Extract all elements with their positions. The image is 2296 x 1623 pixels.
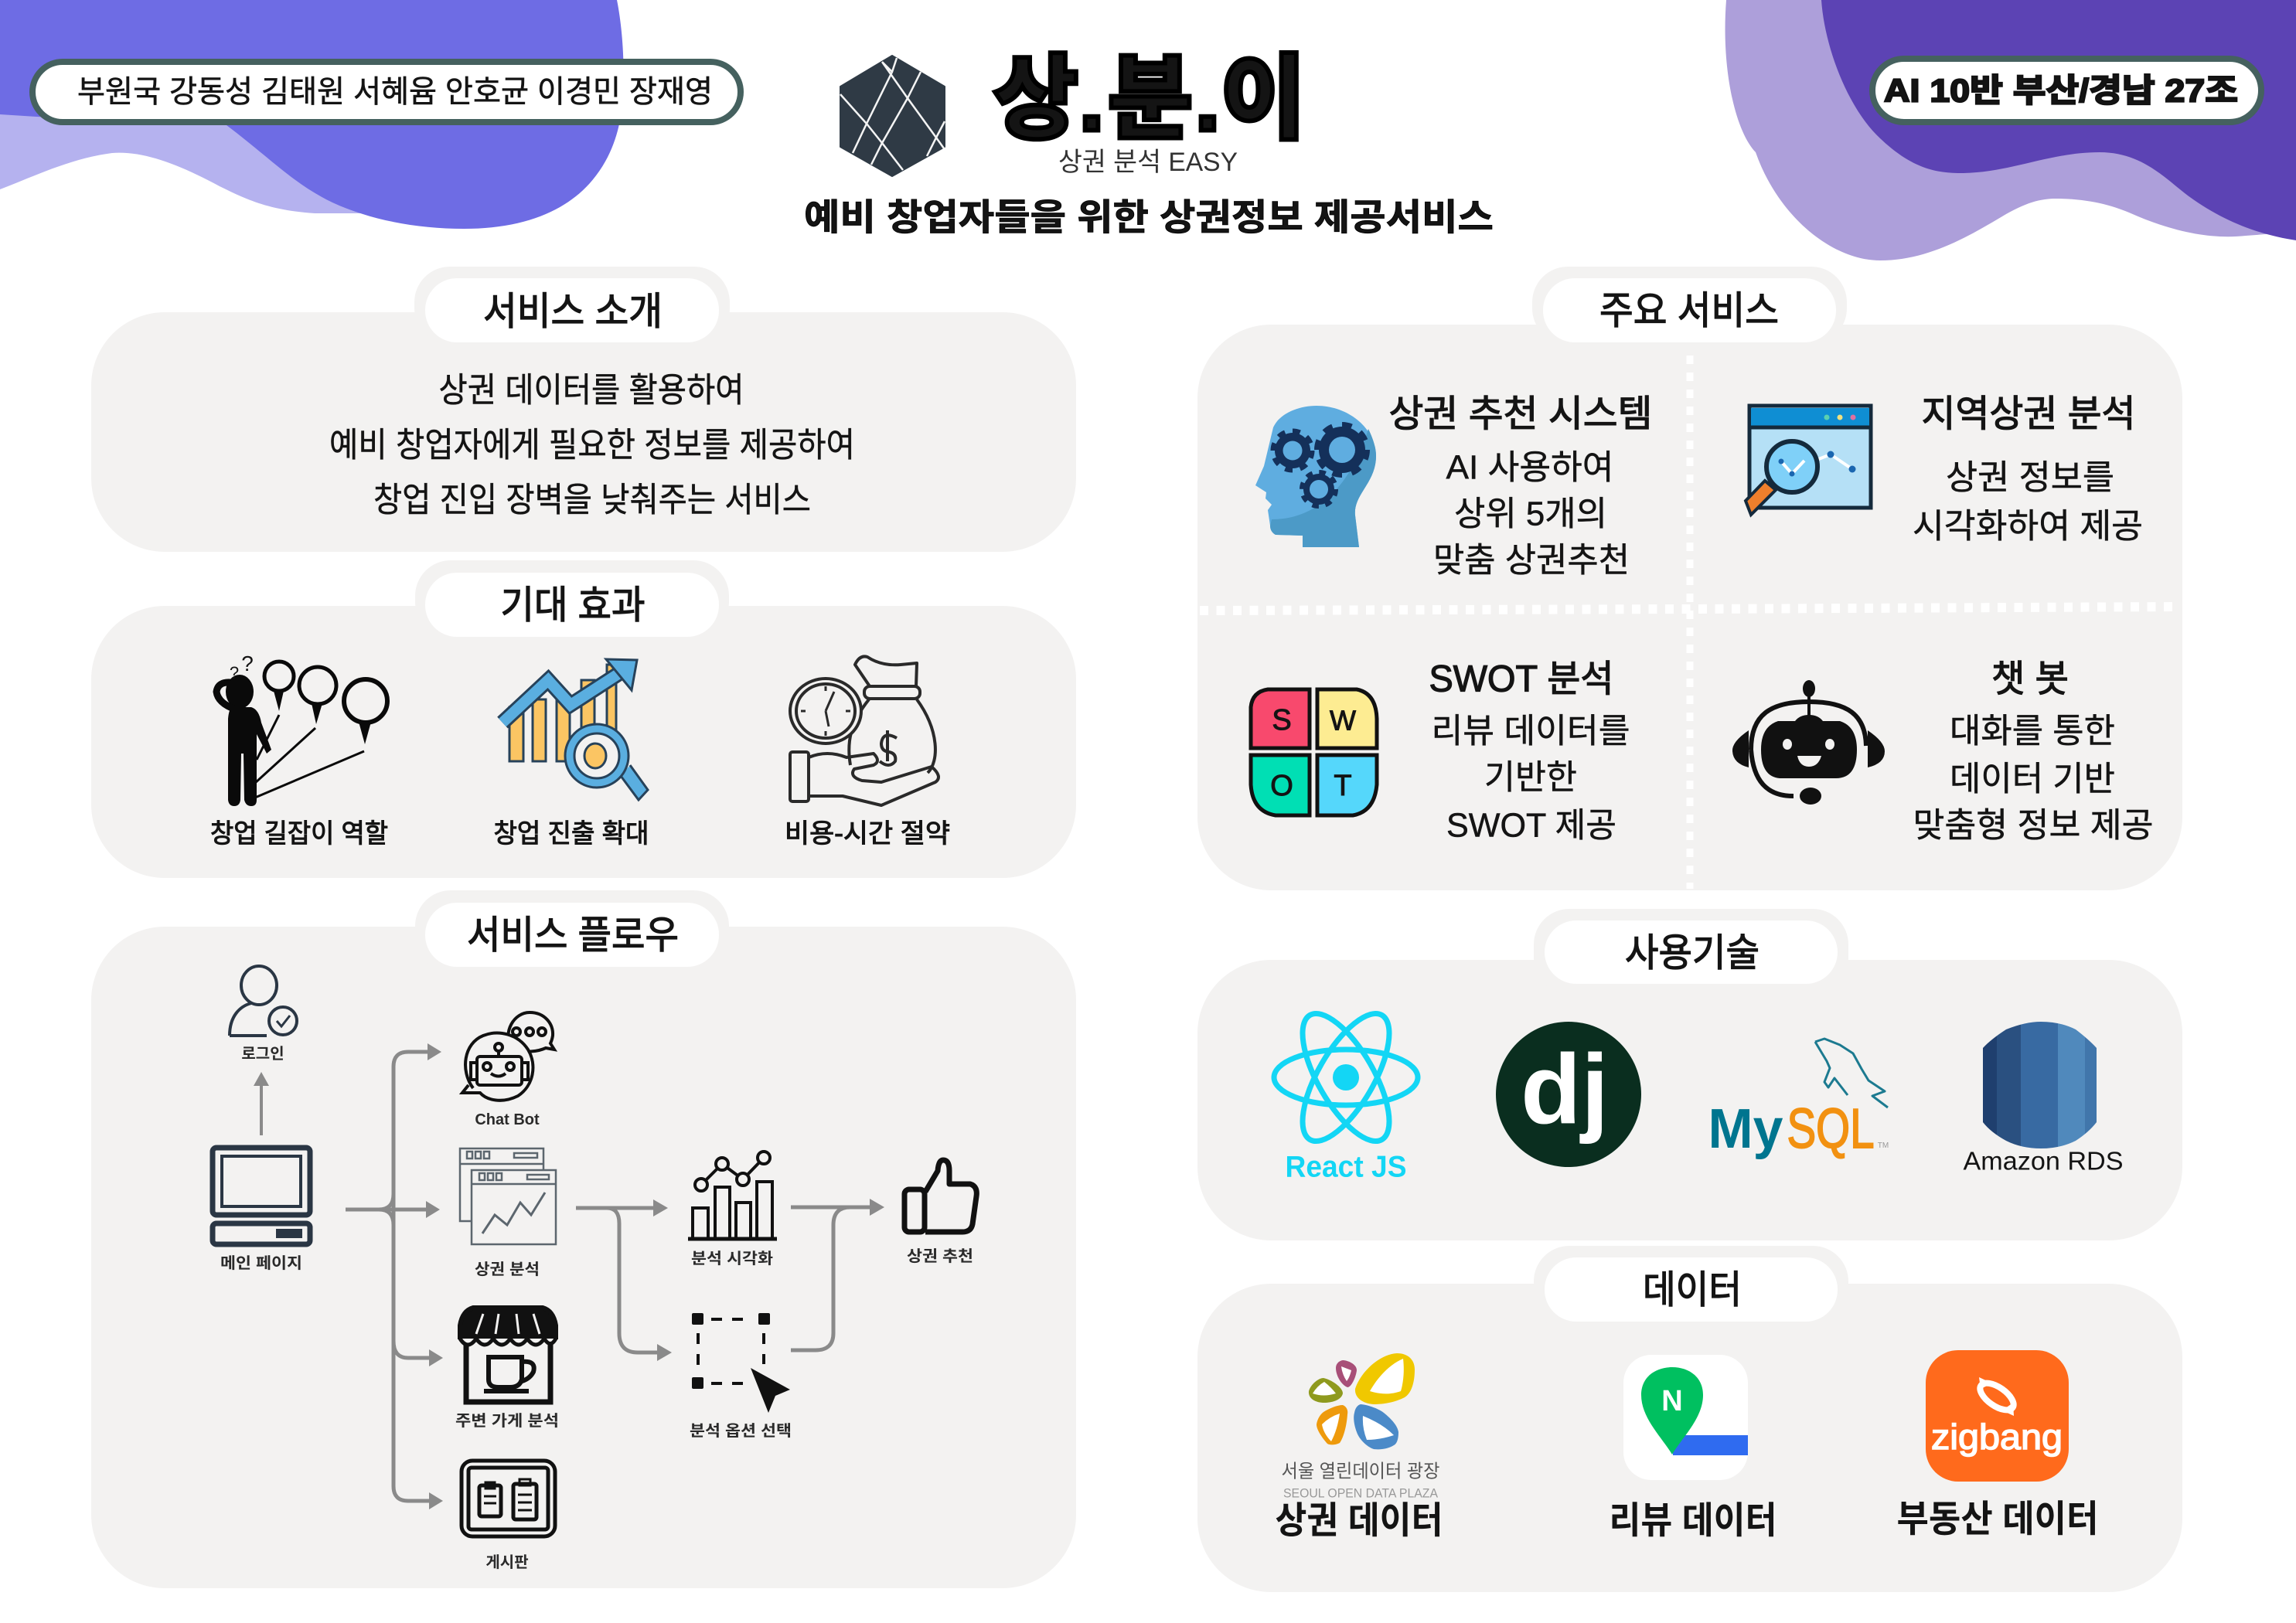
label: review data: 리뷰 데이터: [1610, 1501, 1777, 1541]
text block: commercial recommendation system: AI 사용하여: [1446, 448, 1614, 487]
icon: option select cursor: [692, 1313, 790, 1413]
icon: Amazon RDS logo: Amazon RDS: [1964, 1147, 2123, 1175]
icon: React logo: [1274, 1001, 1418, 1184]
logo: hexagon lattice: [840, 56, 945, 176]
text block: SWOT analysis: 기반한: [1484, 759, 1577, 796]
icon: SWOT blocks: O: [1270, 770, 1293, 802]
icon: growth chart with magnifier: [502, 659, 648, 800]
icon: Seoul open data logo: SEOUL OPEN DATA PLAZA: [1283, 1485, 1439, 1501]
icon: Naver Map logo: [1623, 1355, 1748, 1480]
tagline: 예비 창업자들을 위한 상권정보 제공서비스: [804, 196, 1494, 238]
heading: technologies: 사용기술: [1625, 931, 1759, 975]
panel: technologies: [1197, 909, 2182, 1240]
label: commercial recommendation: 상권 추천: [907, 1247, 973, 1265]
class and team pill: [1872, 59, 2261, 122]
icon: Zigbang logo: zigbang: [1931, 1417, 2063, 1457]
text block: chat bot: 데이터 기반: [1950, 760, 2115, 798]
icon: shop with coffee: [460, 1308, 556, 1402]
decorative blobs top right: [1725, 0, 2296, 260]
icon: login user: [230, 966, 297, 1036]
team members pill: [32, 62, 741, 122]
icon: Amazon RDS logo: [1964, 1022, 2123, 1175]
icon: MySQL logo: SQL: [1787, 1098, 1874, 1160]
label: real estate data: 부동산 데이터: [1897, 1499, 2098, 1540]
text block: chat bot: 대화를 통한: [1950, 713, 2115, 750]
icon: person with map pins: ?: [241, 652, 254, 675]
icon: MySQL logo: TM: [1878, 1142, 1889, 1150]
panel: main services: [1197, 267, 2182, 890]
icon: thumbs up: [904, 1160, 976, 1232]
text block: commercial recommendation system: 맞춤 상권추천: [1433, 541, 1630, 580]
icon: SWOT blocks: T: [1334, 770, 1352, 802]
text block: SWOT analysis: SWOT 제공: [1446, 807, 1616, 844]
heading: data sources: 데이터: [1643, 1268, 1742, 1312]
logo subtitle: 상권 분석 EASY: [1058, 148, 1238, 177]
decorative blobs top left: [0, 0, 624, 229]
text block: commercial recommendation system: 상권 추천 시스템: [1388, 394, 1653, 434]
icon: MySQL logo: [1708, 1039, 1889, 1160]
label: bulletin board: 게시판: [485, 1553, 529, 1571]
label: commercial data: 상권 데이터: [1276, 1501, 1443, 1541]
icon: SWOT blocks: W: [1330, 705, 1356, 736]
text block: chat bot: [1913, 658, 2154, 844]
arrows: analysis branches: [576, 1199, 672, 1361]
icon: SWOT blocks: S: [1272, 704, 1292, 737]
icon: money bag, clock and hand: [790, 656, 938, 805]
arrow: main page to login: [254, 1072, 269, 1135]
label: nearby store analysis: 주변 가게 분석: [455, 1412, 559, 1430]
icon: robot with headset: [1732, 680, 1885, 805]
icon: Naver Map logo: N: [1661, 1385, 1683, 1417]
icon: Seoul open data logo: [1282, 1353, 1439, 1501]
icon: analysis visualization chart: [688, 1152, 777, 1239]
text block: commercial recommendation system: [1388, 394, 1653, 580]
panel: service introduction: [91, 267, 1076, 552]
arrows: main page branches: [346, 1043, 443, 1509]
text block: regional analysis: 지역상권 분석: [1922, 394, 2135, 434]
icon: commercial analysis windows: [460, 1148, 556, 1244]
heading: expected effects: 기대 효과: [501, 584, 645, 627]
label: analysis visualization: 분석 시각화: [691, 1250, 773, 1267]
text block: regional analysis: 시각화하여 제공: [1913, 507, 2143, 546]
text block: chat bot: 맞춤형 정보 제공: [1913, 807, 2154, 844]
label: cost and time saving: 비용-시간 절약: [785, 819, 950, 849]
icon: chat bot: [462, 1012, 554, 1101]
text block: SWOT analysis: [1429, 658, 1630, 844]
text block: regional analysis: 상권 정보를: [1946, 459, 2114, 496]
icon: main page computer: [213, 1148, 310, 1244]
text block: chat bot: 챗 봇: [1991, 658, 2069, 700]
label: main page: 메인 페이지: [220, 1254, 302, 1272]
label: chat bot: Chat Bot: [475, 1111, 540, 1128]
icon: React logo: React JS: [1285, 1150, 1407, 1184]
text block: commercial recommendation system: 상위 5개의: [1454, 495, 1607, 533]
text block: service description: 상권 데이터를 활용하여: [439, 371, 744, 410]
icon: head with gears: [1255, 406, 1376, 547]
text block: SWOT analysis: SWOT 분석: [1429, 658, 1614, 700]
panel: expected effects: [91, 560, 1076, 878]
icon: Django logo: dj: [1521, 1034, 1609, 1145]
icon: SWOT blocks: [1251, 689, 1377, 815]
title: 상.분.이: [993, 48, 1306, 150]
team members pill: 부원국 강동성 김태원 서혜윰 안호균 이경민 장재영: [77, 75, 713, 109]
label: commercial analysis: 상권 분석: [475, 1261, 540, 1278]
heading: service introduction: 서비스 소개: [483, 290, 663, 333]
icon: Seoul open data logo: 서울 열린데이터 광장: [1282, 1461, 1439, 1482]
icon: Django logo: [1496, 1022, 1641, 1167]
icon: MySQL logo: My: [1708, 1098, 1783, 1160]
text block: service description: [329, 371, 855, 519]
text block: service description: 예비 창업자에게 필요한 정보를 제공하여: [329, 427, 855, 464]
text block: service description: 창업 진입 장벽을 낮춰주는 서비스: [373, 481, 811, 519]
panel: data sources: [1197, 1246, 2182, 1592]
label: startup guide: 창업 길잡이 역할: [210, 819, 388, 849]
label: login: 로그인: [241, 1045, 284, 1063]
icon: Zigbang logo: [1926, 1350, 2069, 1482]
icon: person with map pins: [216, 652, 387, 806]
icon: person with map pins: ?: [230, 663, 239, 682]
icon: bulletin board: [462, 1461, 555, 1536]
heading: service flow: 서비스 플로우: [467, 914, 679, 957]
class and team pill: AI 10반 부산/경남 27조: [1884, 73, 2238, 108]
text block: regional analysis: [1913, 394, 2143, 546]
heading: main services: 주요 서비스: [1599, 289, 1779, 332]
text block: SWOT analysis: 리뷰 데이터를: [1432, 713, 1630, 750]
label: analysis options: 분석 옵션 선택: [690, 1422, 792, 1440]
icon: browser window with magnifier: [1746, 406, 1871, 515]
arrows: to recommendation: [791, 1199, 884, 1350]
label: expanded startups: 창업 진출 확대: [493, 819, 649, 849]
panel: service flow: [91, 890, 1076, 1588]
